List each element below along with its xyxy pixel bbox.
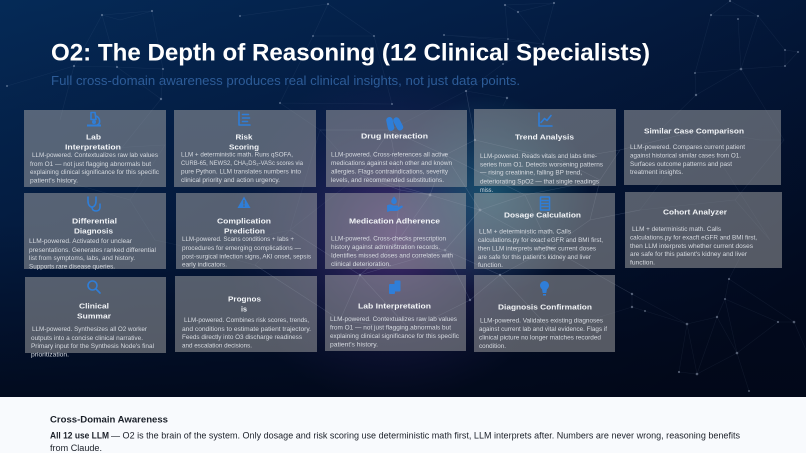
panel: cohort analyzer [625,192,782,268]
text block [31,326,154,359]
text block [630,144,745,176]
text block: LLM + deterministic math. Runs qSOFA, [181,152,293,158]
icon: lightbulb [540,281,549,296]
text block: LLM-powered. Cross-references all active [331,152,449,158]
text block: CURB-65, NEWS2, CHA₂DS₂-VASc scores via [181,160,304,167]
text block: Identifies missed doses and correlates with [331,253,454,260]
text block: LLM-powered. Activated for unclear [29,238,132,245]
text block [331,152,453,184]
text block: miss. [480,187,493,194]
text block: clinical deterioration. [331,261,391,268]
text block: outputs into a concise clinical narrative. [31,335,143,342]
text block: LLM-powered. Synthesizes all O2 worker [32,326,147,333]
text block: and conditions to estimate patient trajectory. [182,326,311,333]
text block: medications against each other and known [331,160,453,167]
heading [65,132,121,151]
footer text: All 12 use LLM [50,430,109,442]
heading [228,294,261,313]
text block: condition. [479,343,506,350]
text block [479,318,607,350]
text block: presentations. Generates ranked differential [29,247,156,254]
text block [182,317,311,350]
heading: Interpretation [65,142,121,151]
icon: pills [386,116,404,132]
icon: microscope [87,112,101,126]
text block: Supports rare disease queries. [29,264,115,271]
heading: Lab [86,132,101,141]
text block: prioritization. [31,352,69,359]
heading: Drug Interaction [361,132,428,141]
text block: from O1 — not just flagging abnormals but [330,325,451,332]
text block: allergies. Flags contraindications, severity [331,169,449,176]
text block: LLM-powered. Combines risk scores, trends, [184,317,309,324]
text block: Feeds directly into O3 discharge readiness [182,334,302,341]
text block: series from O1. Detects worsening patterns [480,162,603,169]
heading: Risk [236,132,253,141]
text block: LLM-powered. Contextualizes raw lab values [32,152,158,159]
heading: Similar Case Comparison [644,127,744,136]
text block: function. [478,262,503,269]
text block: calculations.py for exacft eGFR and BMI first, [630,235,757,242]
heading [72,217,117,236]
text block: then LLM interprets whether current doses [478,246,596,253]
heading: Lab Interpretation [358,302,431,311]
text block: LLM-powered. Contextualizes raw lab values [330,316,457,323]
heading: Dosage Calculation [504,211,581,220]
heading [229,132,259,151]
text block: calculations.py for exact eGFR and BMI first, [478,237,603,244]
text block: procedures for emerging complications — [182,245,302,252]
panel: prognosis [175,276,317,352]
heading: Complication [217,217,271,226]
text block [331,236,454,268]
panel: dosage calculation [474,193,615,269]
text block: function. [630,260,655,267]
text block: are safe for this patient's kidney and liver [630,251,747,258]
icon: scoring list [239,112,250,125]
text block: then LLM interprets whether current doses [630,243,753,250]
text block: post-surgical infection signs, AKI onset, sepsis [182,254,311,261]
heading: Prognos [228,294,261,303]
panel: lab interpretation (second) [325,275,466,351]
icon: stethoscope [88,197,100,211]
heading: Cohort Analyzer [663,208,727,217]
heading: Scoring [229,142,259,151]
text block [30,152,159,184]
heading: Medication Adherence [349,217,440,226]
text block: LLM-powered. Compares current patient [630,144,745,151]
panel: differential diagnosis [24,193,166,271]
panel: medication adherence [325,193,466,269]
footer text: — O2 is the brain of the system. Only dosage and risk scoring use deterministic math first, LLM interprets after. Numbers are never wrong, reasoning benefits [111,430,740,442]
footer callout [0,397,806,453]
panel: lab interpretation [24,110,166,187]
text block: clinical picture no longer matches recorded [479,335,602,342]
text block: Primary input for the Synthesis Node's final [31,343,154,350]
heading: Differential [72,217,117,226]
icon: line chart [539,113,552,126]
text block: deteriorating SpO2 — that single readings [480,179,599,186]
text block: LLM-powered. Validates existing diagnoses [480,318,603,325]
text block: against current lab and vital evidence. Flags if [479,326,607,333]
panel: complication prediction [176,193,317,269]
text block [330,316,459,349]
text block: pure Python. LLM translates numbers into [181,169,302,176]
icon: test tubes [389,280,400,294]
heading [217,217,271,236]
icon: magnifier [88,281,100,293]
panel: clinical summary [25,277,166,359]
icon: warning triangle [238,196,250,208]
text block: treatment insights. [630,169,683,176]
heading: Diagnosis [74,227,113,236]
heading: Clinical [79,302,109,311]
subtitle: Full cross-domain awareness produces real clinical insights, not just data points. [51,73,520,88]
text block: LLM + deterministic math. Calls [632,226,721,233]
panel: diagnosis confirmation [474,275,615,352]
text block: LLM-powered. Scans conditions + labs + [182,236,294,243]
panel: similar case comparison [624,110,781,185]
text block [630,226,757,267]
text block: LLM + deterministic math. Calls [479,229,571,236]
text block: against historical similar cases from O1. [630,153,741,160]
heading: Trend Analysis [515,133,574,142]
text block: clinical priority and action urgency. [181,177,280,184]
text block [181,152,304,184]
heading [77,302,111,321]
footer text [50,430,740,453]
text block: LLM-powered. Reads vitals and labs time- [480,153,597,160]
icon: hand with drop [387,196,403,212]
heading: Diagnosis Confirmation [498,303,592,312]
text block: levels, and recommended substitutions. [331,177,444,184]
text block: patient's history. [30,178,78,184]
text block: history against administration records. [331,244,440,251]
text block [480,153,603,194]
text block [478,229,603,269]
text block: early indicators. [182,262,227,269]
text block: explaining clinical significance for this specific [330,333,459,340]
text block: patient's history. [330,342,378,349]
text block [29,238,156,271]
panel: drug interaction [326,110,467,187]
footer heading: Cross-Domain Awareness [50,414,168,426]
text block [182,236,311,269]
heading: Prediction [224,227,265,236]
heading: is [241,304,247,313]
icon: document [540,197,550,210]
text block: LLM-powered. Cross-checks prescription [331,236,447,243]
text block: — rising creatinine, falling BP trend, [480,170,582,177]
panel: trend analysis [474,109,616,194]
text block: are safe for this patient's kidney and liver [478,254,591,261]
title: O2: The Depth of Reasoning (12 Clinical Specialists) [51,40,650,66]
text block: Surfaces outcome patterns and past [630,161,732,168]
text block: list from symptoms, labs, and history. [29,255,135,262]
text block: explaining clinical significance for this specific [30,169,159,176]
panel: risk scoring [174,110,316,187]
text block: from O1 — not just flagging abnormals but [30,161,151,168]
text block: and escalation decisions. [182,343,252,350]
heading: Summar [77,312,111,321]
